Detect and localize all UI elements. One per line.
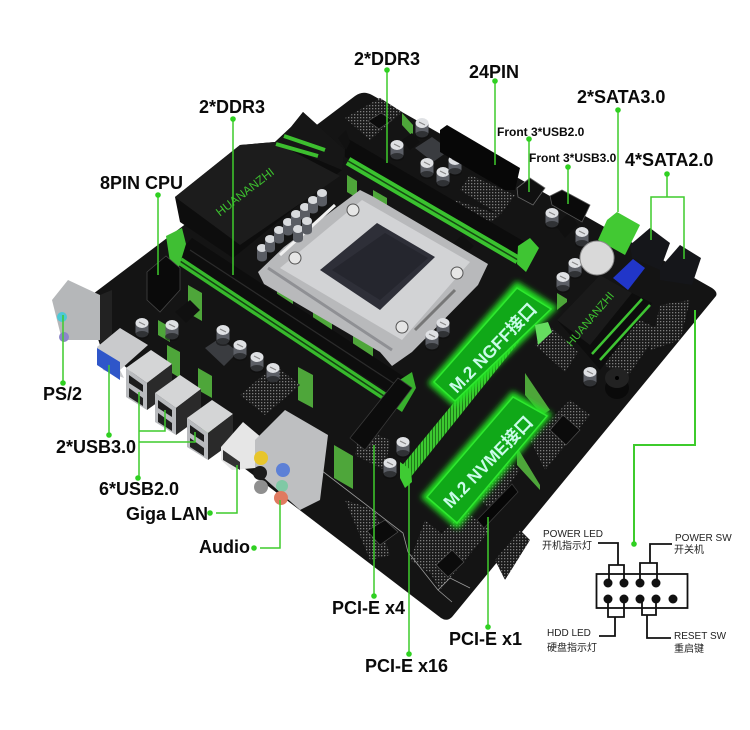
clip [535, 322, 552, 345]
front panel pin diagram: RESET SW [674, 631, 727, 642]
USB 3.0 port [97, 328, 148, 380]
front panel pin diagram: POWER LED [543, 529, 603, 540]
front USB3.0 header [550, 190, 590, 222]
M.2 NGFF slot: M.2 NGFF接口 [445, 299, 541, 397]
labels: PCI-E x16 [365, 656, 448, 676]
buzzer [605, 368, 629, 399]
PCI-E x1 slot [477, 484, 518, 528]
labels: Front 3*USB3.0 [529, 151, 617, 165]
left DDR3 slots [166, 228, 416, 412]
front USB2.0 header [517, 178, 545, 205]
front panel pin diagram: 开机指示灯 [542, 539, 592, 552]
right heatsink [557, 275, 652, 370]
clip [166, 228, 186, 270]
front panel pin diagram: 开关机 [674, 543, 704, 556]
clip [517, 238, 539, 272]
labels: 2*DDR3 [354, 49, 420, 69]
USB 2.0 ports [126, 350, 233, 460]
capacitors [135, 118, 597, 479]
front panel pin diagram: 硬盘指示灯 [547, 641, 597, 654]
green board stripes [158, 113, 567, 490]
DIP switch [613, 259, 645, 290]
PCI-E x4 slot [350, 378, 412, 450]
labels: 2*SATA3.0 [577, 87, 665, 107]
M.2 socket [535, 328, 578, 372]
labels: 6*USB2.0 [99, 479, 179, 499]
front panel pin diagram [542, 529, 732, 655]
left heatsink [175, 112, 345, 258]
battery [580, 241, 614, 275]
audio ports [253, 410, 328, 510]
inductors [205, 137, 450, 366]
LAN port [221, 422, 262, 470]
chips [367, 113, 580, 577]
labels: PCI-E x4 [332, 598, 405, 618]
PS/2 port [52, 280, 112, 343]
labels [43, 49, 713, 676]
front panel pin diagram: 重启键 [674, 642, 704, 655]
silkscreen component patches [240, 98, 690, 590]
labels: 8PIN CPU [100, 173, 183, 193]
labels: 2*USB3.0 [56, 437, 136, 457]
labels: PS/2 [43, 384, 82, 404]
SATA2 connectors [630, 228, 701, 285]
motherboard [52, 93, 716, 620]
labels: 24PIN [469, 62, 519, 82]
CPU socket [258, 190, 488, 366]
PCI-E x16 slot [400, 310, 538, 488]
labels: Front 3*USB2.0 [497, 125, 585, 139]
callout lines [60, 67, 695, 657]
labels: Audio [199, 537, 250, 557]
pcb [85, 93, 716, 620]
right heatsink: HUANANZHI [565, 290, 617, 349]
labels: 2*DDR3 [199, 97, 265, 117]
labels: 4*SATA2.0 [625, 150, 713, 170]
brand: HUANANZHI [213, 165, 277, 219]
M.2 NVME slot: M.2 NVME接口 [439, 412, 537, 512]
labels: Giga LAN [126, 504, 208, 524]
labels: PCI-E x1 [449, 629, 522, 649]
M.2 NVME slot [425, 395, 548, 525]
right DDR3 slots [338, 130, 539, 272]
front panel pin diagram: POWER SW [675, 533, 732, 544]
SATA3 connector [598, 212, 640, 255]
M.2 NGFF slot [432, 285, 553, 403]
8 pin CPU connector [147, 256, 180, 312]
front panel pin diagram: HDD LED [547, 628, 591, 639]
24 pin connector [440, 125, 520, 190]
